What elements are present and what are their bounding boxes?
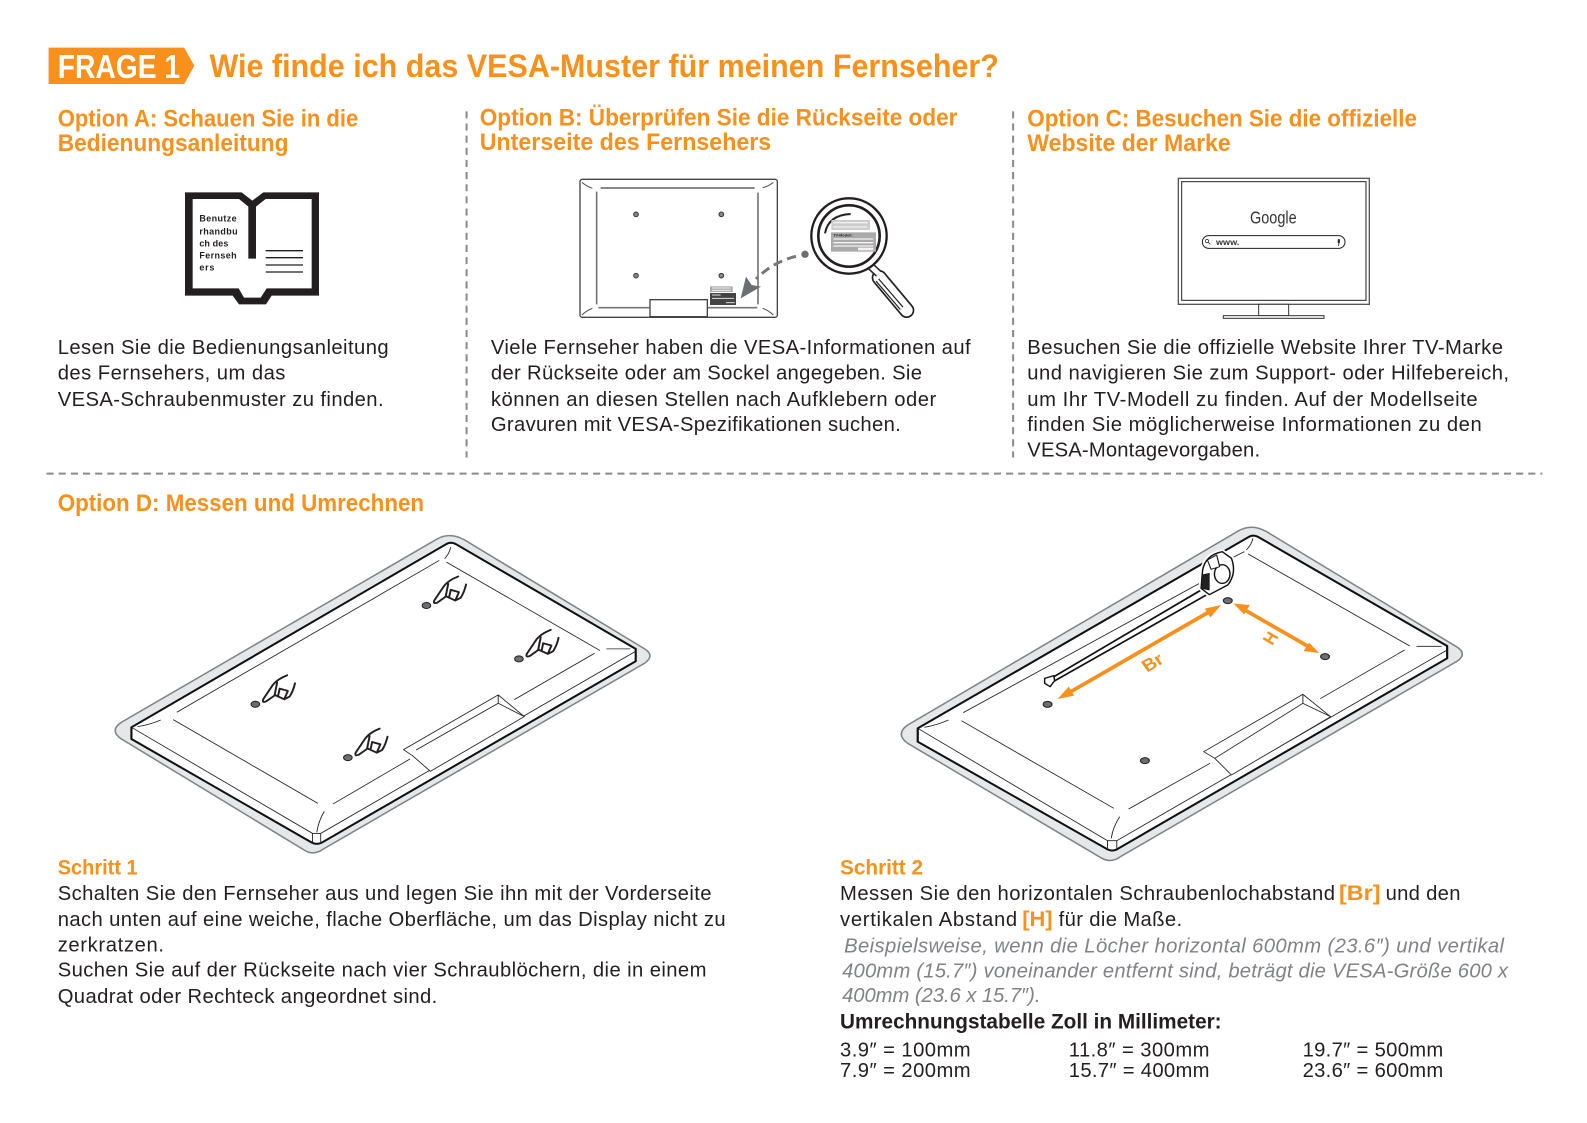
text: step 2 bbox=[840, 881, 1460, 931]
heading: option A: Option A: Schauen Sie in die bbox=[58, 106, 358, 133]
text: step 1: nach unten auf eine weiche, flache Oberfläche, um das Display nicht zu bbox=[58, 909, 726, 931]
screw holes bbox=[251, 602, 523, 761]
table: inch to millimeter: 7.9″ = 200mm bbox=[840, 1060, 971, 1082]
heading: option B: Option B: Überprüfen Sie die Rückseite oder bbox=[480, 105, 958, 132]
illustration: TV with Google search: Google bbox=[1250, 207, 1297, 227]
title badge: FRAGE 1: FRAGE 1 bbox=[58, 49, 180, 86]
text: option B: der Rückseite oder am Sockel angegeben. Sie bbox=[491, 363, 922, 385]
text: option B: können an diesen Stellen nach Aufklebern oder bbox=[491, 389, 936, 411]
icon: open manual book: Fernseh bbox=[199, 251, 237, 261]
text: option C bbox=[1027, 337, 1509, 461]
text: step 2: für die Maße. bbox=[1059, 909, 1182, 931]
icon: pointing hand 1 bbox=[434, 576, 466, 603]
text: step 2: [Br] bbox=[1339, 881, 1381, 905]
text: option A: des Fernsehers, um das bbox=[58, 363, 285, 385]
icon: tape measure bbox=[1045, 552, 1234, 687]
text: option C: um Ihr TV-Modell zu finden. Auf der Modellseite bbox=[1027, 389, 1478, 411]
text: option C: finden Sie möglicherweise Informationen zu den bbox=[1027, 414, 1482, 436]
text: option C: Besuchen Sie die offizielle Website Ihrer TV-Marke bbox=[1027, 337, 1503, 359]
arrow: H height bbox=[1234, 604, 1319, 653]
arrow: Br width: Br bbox=[1137, 649, 1167, 676]
text: step 1: Suchen Sie auf der Rückseite nach vier Schraublöchern, die in einem bbox=[58, 960, 706, 982]
text: step 1: zerkratzen. bbox=[58, 934, 164, 956]
text: example in italics bbox=[842, 935, 1509, 1007]
heading: option C: Website der Marke bbox=[1027, 130, 1231, 157]
text: step 2: [H] bbox=[1022, 907, 1053, 931]
text: step 1 bbox=[58, 883, 726, 1008]
heading: option B bbox=[480, 105, 958, 156]
icon: open manual book: rhandbu bbox=[199, 227, 238, 237]
text: option C: VESA-Montagevorgaben. bbox=[1027, 439, 1260, 461]
text: option C: und navigieren Sie zum Support- oder Hilfebereich, bbox=[1027, 363, 1509, 385]
heading: option D: Option D: Messen und Umrechnen bbox=[58, 490, 424, 517]
heading: Schritt 1: Schritt 1 bbox=[58, 855, 138, 879]
illustration: TV lying face down, step 1 bbox=[115, 536, 650, 853]
table: inch to millimeter: 23.6″ = 600mm bbox=[1303, 1060, 1443, 1082]
title: Wie finde ich das VESA-Muster für meinen Fernseher? bbox=[210, 48, 999, 84]
icon: open manual book: Benutze bbox=[199, 214, 237, 224]
table: inch to millimeter: 11.8″ = 300mm bbox=[1069, 1040, 1209, 1062]
table: inch to millimeter: 15.7″ = 400mm bbox=[1069, 1060, 1209, 1082]
heading: conversion table: Umrechnungstabelle Zoll in Millimeter: bbox=[840, 1009, 1222, 1033]
icon: magnifying glass: TV-Modell: bbox=[833, 234, 853, 238]
arrow: H height: H bbox=[1259, 629, 1283, 648]
text: option A: Lesen Sie die Bedienungsanleitung bbox=[58, 337, 389, 359]
table: inch to millimeter: 19.7″ = 500mm bbox=[1303, 1040, 1443, 1062]
illustration: TV measuring, step 2 bbox=[901, 527, 1462, 860]
text: step 1: Quadrat oder Rechteck angeordnet sind. bbox=[58, 986, 437, 1008]
icon: pointing hand 3 bbox=[263, 675, 295, 702]
heading: option A bbox=[58, 106, 358, 157]
icon: pointing hand 2 bbox=[526, 630, 559, 657]
text: example in italics: 400mm (15.7″) voneinander entfernt sind, beträgt die VESA-Größe 600 x bbox=[842, 961, 1509, 983]
text: option A bbox=[58, 337, 389, 411]
text: option B bbox=[491, 337, 971, 436]
text: step 1: Schalten Sie den Fernseher aus und legen Sie ihn mit der Vorderseite bbox=[58, 883, 712, 905]
text: option B: Gravuren mit VESA-Spezifikationen suchen. bbox=[491, 414, 901, 436]
heading: Schritt 2: Schritt 2 bbox=[840, 855, 923, 879]
illustration: TV with Google search: www. bbox=[1215, 237, 1239, 247]
arrow: dashed pointer to label bbox=[741, 251, 809, 298]
icon: open manual book: ch des bbox=[199, 239, 228, 249]
icon: pointing hand 4 bbox=[355, 729, 387, 755]
arrow: Br width bbox=[1058, 605, 1221, 699]
illustration: back of TV with label bbox=[580, 179, 907, 317]
table: inch to millimeter: 3.9″ = 100mm bbox=[840, 1040, 971, 1062]
text: example in italics: Beispielsweise, wenn die Löcher horizontal 600mm (23.6″) und vertikal bbox=[844, 935, 1504, 957]
heading: option B: Unterseite des Fernsehers bbox=[480, 129, 771, 156]
icon: magnifying glass bbox=[811, 198, 907, 310]
heading: option C: Option C: Besuchen Sie die offizielle bbox=[1027, 106, 1417, 133]
icon: open manual book bbox=[185, 192, 319, 304]
heading: option A: Bedienungsanleitung bbox=[58, 130, 288, 157]
icon: open manual book: ers bbox=[199, 263, 214, 273]
screw holes bbox=[1043, 598, 1330, 764]
text: step 2: Messen Sie den horizontalen Schraubenlochabstand bbox=[840, 883, 1335, 905]
illustration: TV with Google search bbox=[1178, 178, 1369, 318]
table: inch to millimeter bbox=[840, 1040, 1443, 1082]
text: example in italics: 400mm (23.6 x 15.7″). bbox=[842, 985, 1040, 1007]
heading: option C bbox=[1027, 106, 1417, 157]
text: option B: Viele Fernseher haben die VESA-Informationen auf bbox=[491, 337, 971, 359]
text: step 2: und den bbox=[1386, 883, 1460, 905]
text: step 2: vertikalen Abstand bbox=[840, 909, 1017, 931]
text: option A: VESA-Schraubenmuster zu finden. bbox=[58, 389, 384, 411]
